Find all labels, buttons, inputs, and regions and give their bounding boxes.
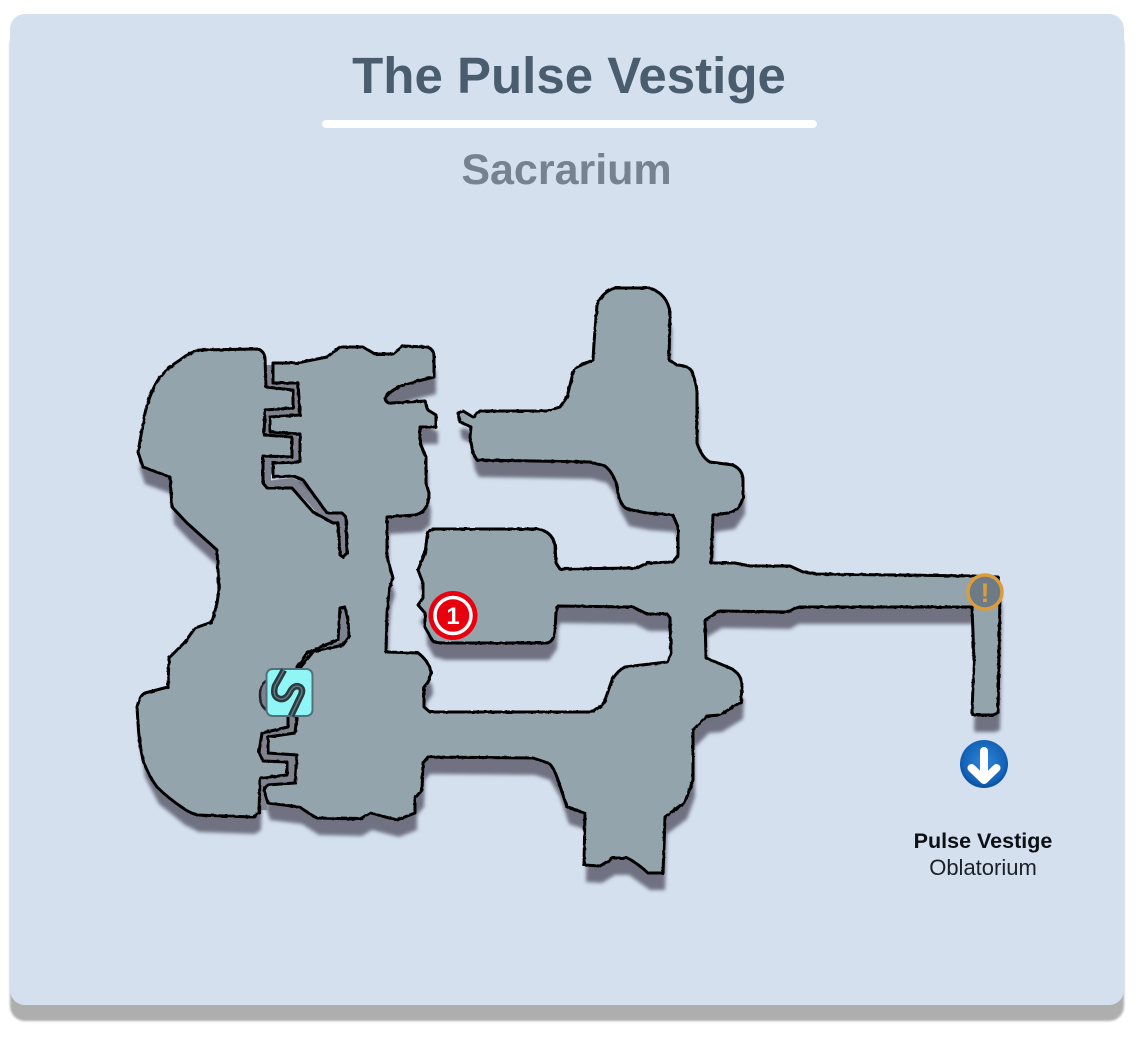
icon: blue down arrow exit bbox=[960, 740, 1008, 788]
icon: orange alert marker: ! bbox=[980, 578, 990, 608]
crevice shading bbox=[263, 365, 345, 810]
subtitle: Sacrarium bbox=[461, 146, 672, 194]
icon: orange alert marker bbox=[968, 575, 1002, 609]
exit label: destination name: Pulse Vestige bbox=[914, 829, 1052, 853]
icon: red numbered marker 1 bbox=[428, 591, 478, 640]
map floor outline bbox=[137, 288, 1000, 873]
icon: red numbered marker 1: 1 bbox=[446, 603, 460, 630]
icon: cyan save point tile bbox=[266, 669, 312, 716]
map drop shadow bbox=[139, 305, 1002, 890]
title underline bbox=[322, 120, 817, 128]
title: The Pulse Vestige bbox=[352, 47, 786, 104]
exit label: destination area: Oblatorium bbox=[929, 855, 1037, 880]
